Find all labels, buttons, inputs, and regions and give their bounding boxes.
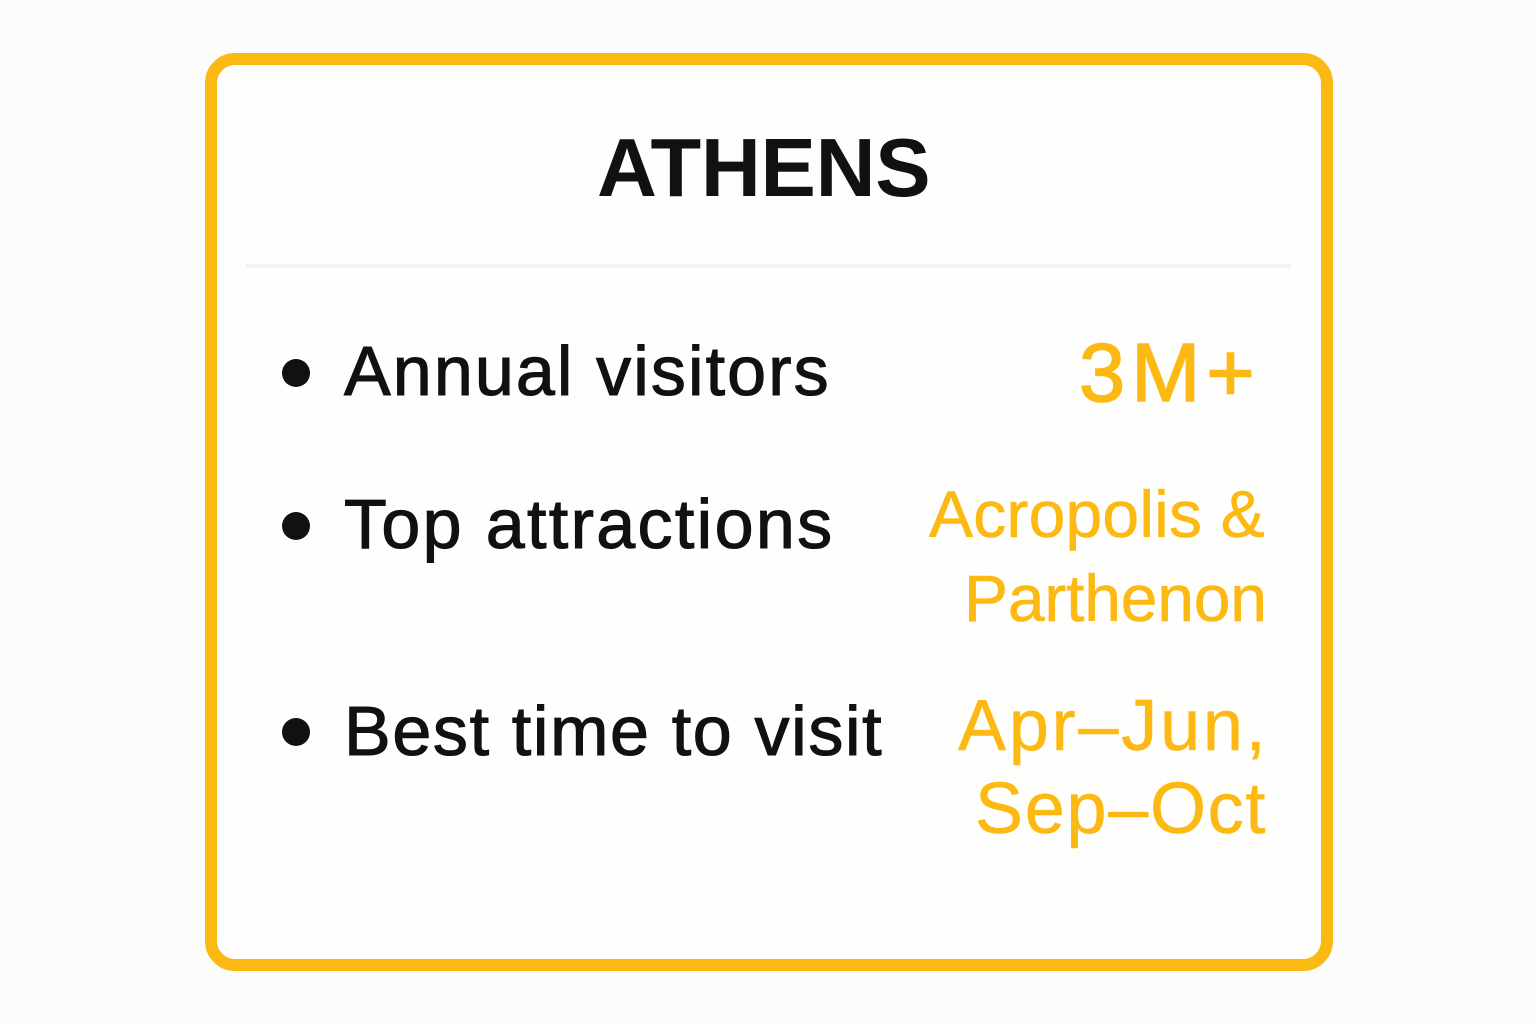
bullet: [282, 359, 310, 387]
row: best time to visit: [282, 686, 1269, 849]
row: top attractions: [282, 477, 1267, 635]
value line 2: Sep–Oct: [975, 769, 1267, 849]
value: 3M+: [1079, 326, 1261, 419]
panel: Athens card: [205, 53, 1333, 971]
value line 1: Acropolis &: [929, 477, 1265, 551]
bullet: [282, 512, 310, 540]
value line 2: Parthenon: [964, 561, 1267, 635]
value line 1: Apr–Jun,: [958, 686, 1269, 766]
value: [928, 477, 1267, 635]
bullet: [282, 718, 310, 746]
label: Annual visitors: [344, 332, 831, 410]
value: [958, 686, 1269, 849]
title: ATHENS: [597, 121, 930, 214]
row: annual visitors: [282, 326, 1261, 419]
divider: [246, 264, 1291, 268]
label: Top attractions: [344, 485, 834, 563]
label: Best time to visit: [344, 692, 883, 770]
